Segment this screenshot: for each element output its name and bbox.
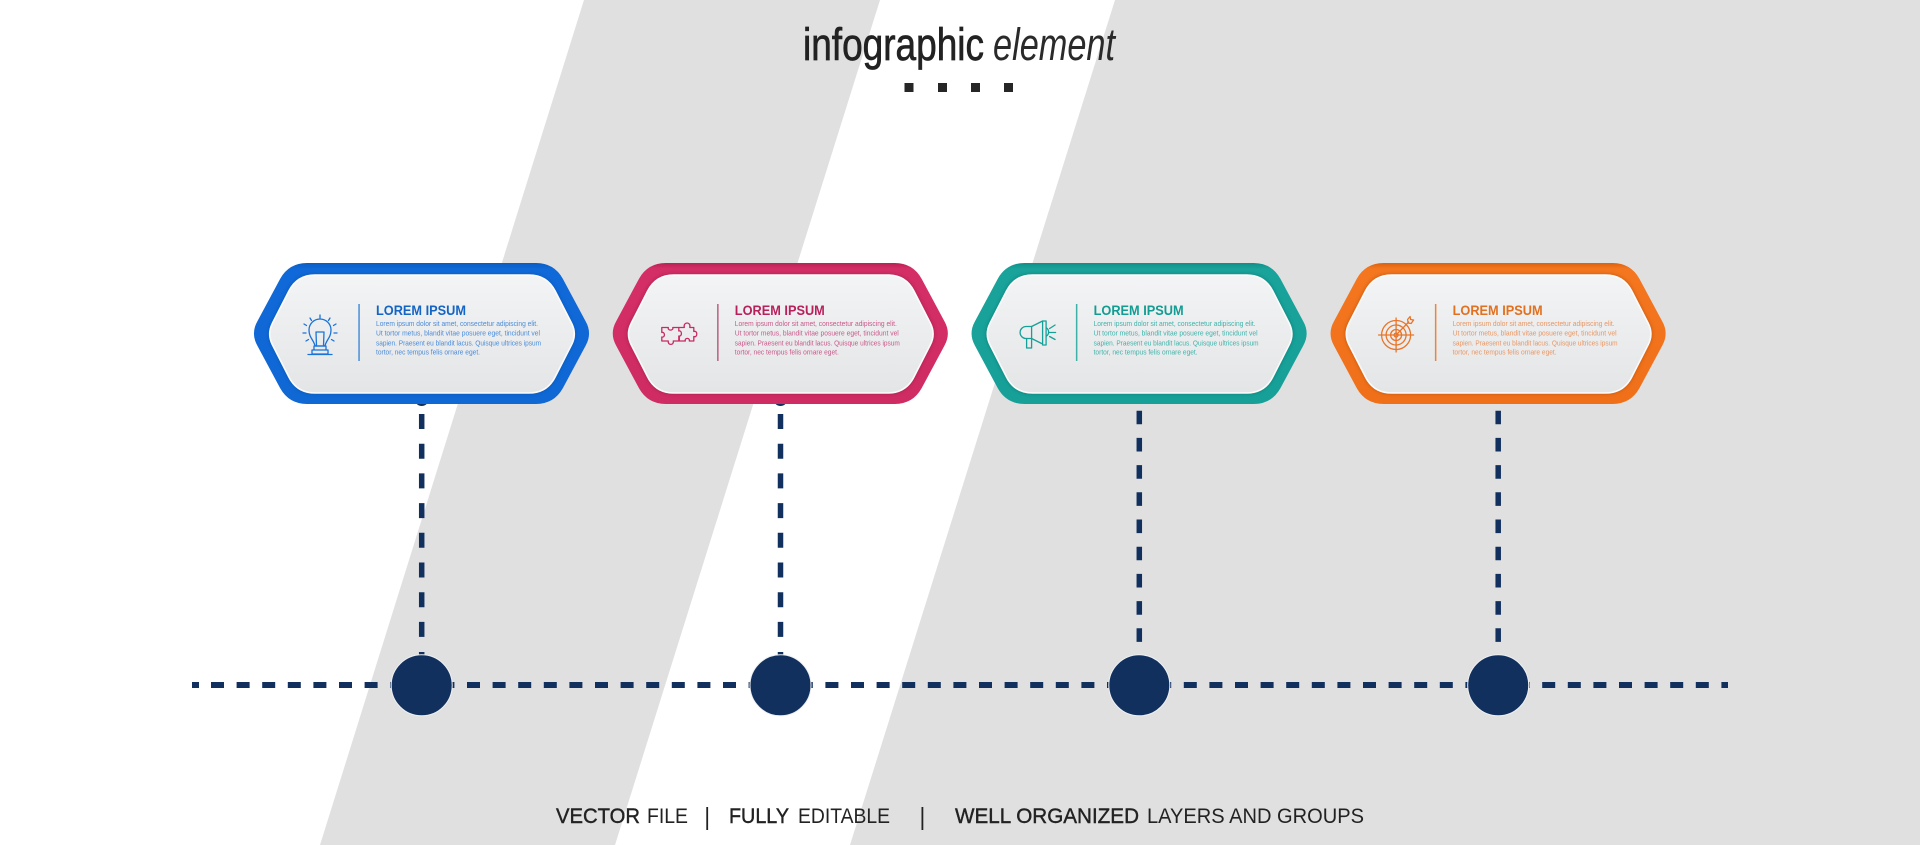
title: element bbox=[993, 19, 1117, 70]
timeline node 3 bbox=[1109, 655, 1170, 716]
body text: tortor, nec tempus felis ornare eget. bbox=[1453, 348, 1557, 356]
title decoration: four squares bbox=[904, 83, 1013, 92]
panel: step 1 blue card bbox=[254, 263, 589, 404]
body text: Lorem ipsum dolor sit amet, consectetur adipiscing elit. bbox=[1094, 319, 1256, 328]
body text: tortor, nec tempus felis ornare eget. bbox=[376, 348, 480, 356]
panel: step 4 orange card bbox=[1331, 263, 1666, 404]
footer tagline: LAYERS AND GROUPS bbox=[1147, 805, 1364, 828]
body text: Lorem ipsum dolor sit amet, consectetur adipiscing elit. bbox=[376, 319, 538, 328]
body text: Ut tortor metus, blandit vitae posuere eget, tincidunt vel bbox=[1453, 328, 1617, 338]
footer tagline: FILE bbox=[647, 805, 688, 828]
timeline node 1 bbox=[391, 655, 452, 716]
icon: megaphone bbox=[1020, 321, 1056, 348]
footer tagline: WELL ORGANIZED bbox=[955, 805, 1139, 828]
body text: Ut tortor metus, blandit vitae posuere eget, tincidunt vel bbox=[1094, 328, 1258, 338]
card inner face bbox=[270, 275, 574, 393]
connector: step 1 bbox=[415, 392, 429, 660]
card frame bbox=[613, 263, 948, 404]
card inner face bbox=[1346, 275, 1651, 393]
body text bbox=[1453, 319, 1618, 356]
body text: tortor, nec tempus felis ornare eget. bbox=[735, 348, 839, 356]
body text bbox=[376, 319, 541, 356]
panel: step 2 pink card bbox=[613, 263, 948, 404]
divider bbox=[717, 304, 719, 361]
card inner face bbox=[987, 275, 1292, 393]
title: infographic bbox=[803, 19, 984, 70]
body text: sapien. Praesent eu blandit lacus. Quisque ultrices ipsum bbox=[376, 338, 541, 348]
footer tagline bbox=[556, 805, 1364, 830]
icon: puzzle pieces bbox=[662, 323, 697, 344]
background panel: right grey area bbox=[850, 0, 1920, 845]
footer tagline: VECTOR bbox=[556, 805, 640, 828]
timeline node 4 bbox=[1468, 655, 1529, 716]
connector: step 4 bbox=[1495, 411, 1501, 642]
connector: step 2 bbox=[774, 392, 788, 660]
background panel: left slanted grey band bbox=[320, 0, 880, 845]
body text: Ut tortor metus, blandit vitae posuere eget, tincidunt vel bbox=[376, 328, 540, 338]
body text: sapien. Praesent eu blandit lacus. Quisque ultrices ipsum bbox=[735, 338, 900, 348]
heading: LOREM IPSUM bbox=[376, 302, 466, 318]
footer tagline: EDITABLE bbox=[798, 805, 890, 828]
connector: step 3 bbox=[1137, 411, 1142, 642]
body text bbox=[1094, 319, 1259, 356]
panel: step 3 teal card bbox=[972, 263, 1307, 404]
icon: target with arrow bbox=[1379, 316, 1414, 352]
heading: LOREM IPSUM bbox=[735, 302, 825, 318]
body text: sapien. Praesent eu blandit lacus. Quisque ultrices ipsum bbox=[1453, 338, 1618, 348]
card frame bbox=[254, 263, 589, 404]
timeline node 2 bbox=[750, 655, 811, 716]
body text: sapien. Praesent eu blandit lacus. Quisque ultrices ipsum bbox=[1094, 338, 1259, 348]
footer tagline: FULLY bbox=[729, 805, 789, 828]
body text: tortor, nec tempus felis ornare eget. bbox=[1094, 348, 1198, 356]
body text bbox=[735, 319, 900, 356]
card inner face bbox=[628, 275, 933, 393]
card frame bbox=[972, 263, 1307, 404]
heading: LOREM IPSUM bbox=[1453, 302, 1543, 318]
icon: light bulb bbox=[303, 315, 337, 354]
card frame bbox=[1331, 263, 1666, 404]
body text: Ut tortor metus, blandit vitae posuere eget, tincidunt vel bbox=[735, 328, 899, 338]
divider bbox=[358, 304, 360, 361]
heading: LOREM IPSUM bbox=[1094, 302, 1184, 318]
body text: Lorem ipsum dolor sit amet, consectetur adipiscing elit. bbox=[735, 319, 897, 328]
horizontal dashed timeline bbox=[192, 682, 1728, 688]
divider bbox=[1076, 304, 1077, 361]
body text: Lorem ipsum dolor sit amet, consectetur adipiscing elit. bbox=[1453, 319, 1615, 328]
divider bbox=[1435, 304, 1436, 361]
